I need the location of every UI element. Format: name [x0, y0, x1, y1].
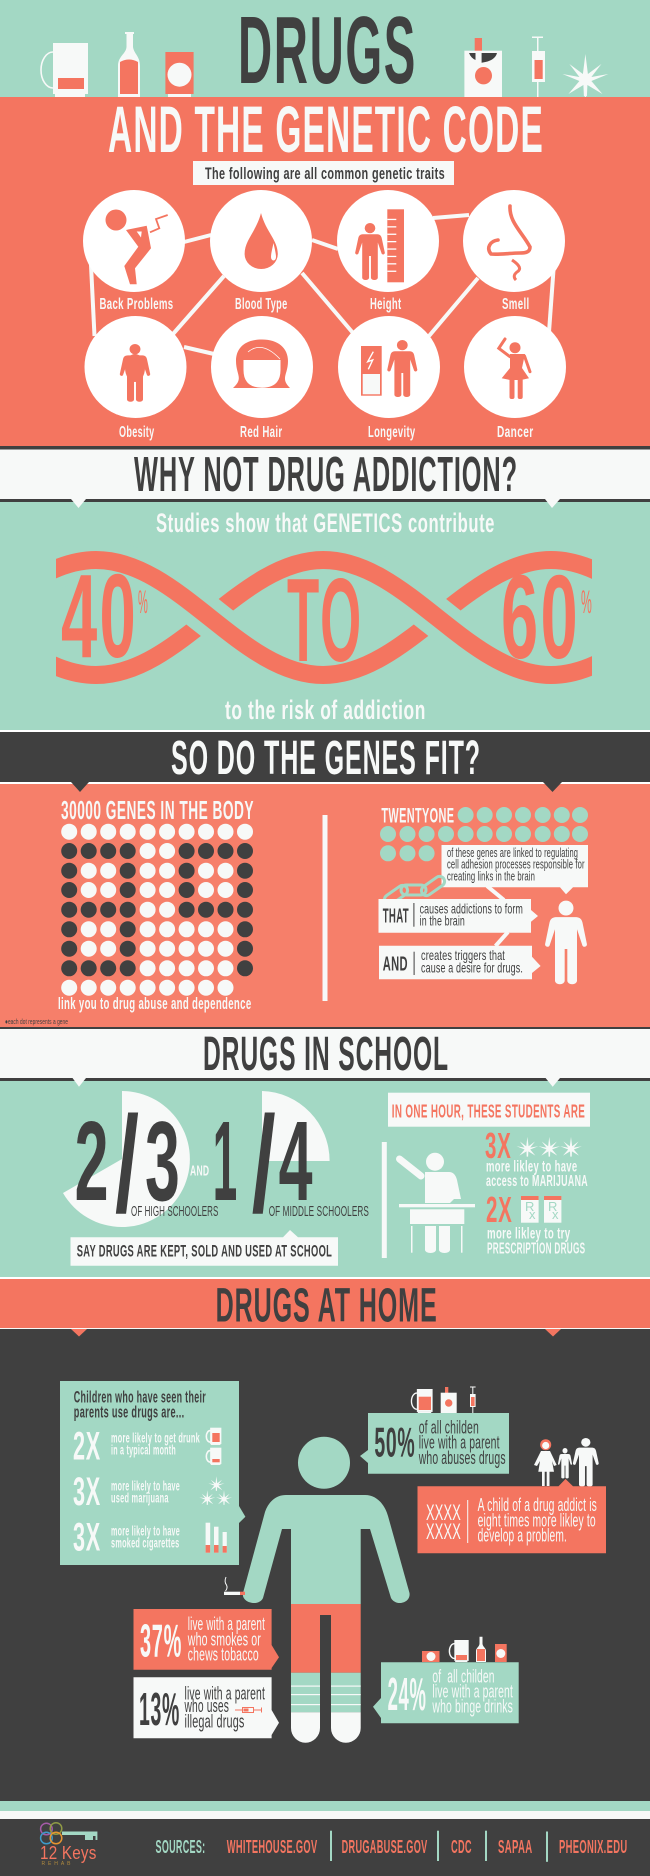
list: sources: DRUGABUSE.GOV: [342, 1837, 428, 1857]
callout: 50 percent: of all childen: [419, 1417, 479, 1437]
stat: 3x cigarettes: smoked cigarettes: [111, 1535, 180, 1550]
logo: 12 keys rehab: REHAB: [42, 1861, 71, 1867]
text: prescription drugs: more likley to try: [487, 1226, 570, 1243]
callout: 37 percent: 37%: [140, 1615, 182, 1667]
panel: school stats: [0, 1078, 650, 1277]
heading: drugs at home: DRUGS AT HOME: [216, 1280, 438, 1332]
callout: 37 percent: chews tobacco: [188, 1645, 259, 1665]
heading: 30000 genes: 30000 GENES IN THE BODY: [61, 795, 254, 825]
callout: eight times more likley: develop a problem.: [478, 1526, 567, 1546]
panel: header band: [0, 0, 650, 104]
callout: 24 percent: [373, 1662, 519, 1723]
callout: 24 percent: live with a parent: [432, 1681, 513, 1701]
icon: student at desk: [399, 1153, 475, 1253]
panel: drugs at home header: [0, 1277, 650, 1332]
panel: genetics contribute: %: [581, 584, 592, 620]
callout: and: [379, 946, 541, 979]
stat: 2x drunk: in a typical month: [111, 1443, 176, 1458]
icon: family: [534, 1438, 599, 1487]
trait: height: Height: [370, 296, 402, 313]
callout: 37 percent: [134, 1609, 279, 1670]
trait: obesity: Obesity: [119, 424, 154, 441]
label: common genetic traits: The following are all common genetic traits: [205, 164, 445, 183]
icons: mug, cigarettes, syringe: [411, 1386, 476, 1413]
stat: two thirds: 3: [145, 1098, 182, 1224]
stat: 3x marijuana: [73, 1470, 180, 1514]
callout: that: in the brain: [420, 912, 465, 928]
callout: 13 percent: 13%: [139, 1683, 180, 1735]
list: sources: SAPAA: [498, 1837, 532, 1857]
chart: dna helix: [0, 560, 650, 675]
trait: red hair: Red Hair: [240, 424, 282, 441]
callout: eight times more likley: XXXX: [426, 1519, 461, 1544]
callout: children who have seen: Children who have seen their: [74, 1387, 206, 1406]
callout: 50 percent: [360, 1413, 509, 1474]
icon: person: [545, 901, 587, 984]
logo: 12 keys rehab: [40, 1823, 97, 1867]
panel: so do the genes fit header: [0, 730, 650, 785]
stat: 3x cigarettes: more likely to have: [111, 1523, 180, 1538]
trait: red hair: [211, 316, 313, 441]
chart: dot grid of genes: [61, 824, 253, 996]
text: of middle schoolers: OF MIDDLE SCHOOLERS: [269, 1204, 369, 1220]
callout: kept, sold and used: SAY DRUGS ARE KEPT, SOLD AND USED AT SCHOOL: [77, 1242, 332, 1261]
chart: one quarter pie: [262, 1091, 330, 1161]
callout: and: creates triggers that: [421, 947, 505, 963]
trait: smell: Smell: [502, 296, 530, 313]
text: of high schoolers: OF HIGH SCHOOLERS: [131, 1204, 218, 1220]
callout: eight times more likley: [418, 1479, 606, 1553]
callout: 24 percent: 24%: [388, 1668, 427, 1720]
icons: three leaves: [517, 1137, 582, 1157]
text: prescription drugs: [487, 1226, 585, 1257]
trait: dancer: Dancer: [497, 424, 534, 441]
callout: 24 percent: who binge drinks: [432, 1697, 513, 1717]
text: link to drug abuse: link you to drug abuse and dependence: [58, 994, 251, 1013]
icon: beer mug: [41, 43, 88, 97]
panel: genetics contribute: TO: [287, 554, 363, 687]
list: sources: [227, 1831, 628, 1862]
panel: genetic traits: [0, 92, 650, 446]
panel: why not drug addiction header: [0, 446, 650, 502]
stat: one quarter: /: [252, 1088, 279, 1240]
stat: 40 percent: [61, 550, 148, 683]
callout: 50 percent: 50%: [374, 1419, 415, 1466]
icons: prescription bottles: R: [525, 1199, 535, 1214]
panel: genetics contribute: [0, 499, 650, 730]
callout: 13 percent: who uses: [184, 1696, 229, 1716]
stat: one quarter: 4: [279, 1098, 315, 1224]
trait: longevity: [338, 316, 440, 441]
callout: that: [378, 899, 538, 933]
connector lines between traits: [91, 215, 554, 354]
panel: home stats: [0, 1328, 650, 1801]
icons: prescription bottles: R: [548, 1199, 558, 1214]
text: access to marijuana: [486, 1159, 588, 1190]
trait: obesity: [84, 316, 186, 441]
callout: that: causes addictions to form: [420, 900, 523, 916]
callout: children who have seen: parents use drugs are...: [74, 1402, 184, 1421]
callout: 50 percent: live with a parent: [419, 1433, 500, 1453]
heading: twentyone: TWENTYONE: [381, 805, 454, 828]
stat: three times: 3X: [485, 1125, 512, 1166]
trait: blood type: Blood Type: [235, 296, 288, 313]
label: common genetic traits: [193, 161, 454, 185]
icon: liquor bottle: [118, 32, 140, 97]
label: in one hour: [388, 1093, 590, 1127]
panel: drugs in school header: [0, 1027, 650, 1081]
callout: eight times more likley: XXXX: [426, 1500, 461, 1525]
list: sources: WHITEHOUSE.GOV: [227, 1837, 318, 1857]
callout: 37 percent: who smokes or: [187, 1629, 261, 1649]
callout: 13 percent: [134, 1677, 279, 1738]
trait: back problems: [83, 190, 185, 313]
trait: blood type: [210, 190, 312, 313]
icon: can: [165, 52, 194, 97]
icon: small syringe: [235, 1708, 262, 1712]
callout: cell adhesion: [442, 845, 588, 894]
icon: syringe: [532, 36, 545, 97]
panel: genes: [0, 782, 650, 1027]
chart: two thirds pie: [63, 1091, 190, 1227]
icon: lit cigarette: [224, 1577, 245, 1595]
stat: 3x cigarettes: 3X: [73, 1516, 101, 1560]
stat: two thirds: [75, 1088, 182, 1240]
stat: 2x drunk: 2X: [73, 1424, 101, 1468]
text: access to marijuana: more likley to have: [486, 1159, 578, 1176]
panel: footer: [0, 1801, 650, 1876]
callout: 50 percent: who abuses drugs: [418, 1448, 506, 1468]
stat: 2x drunk: more likely to get drunk: [111, 1431, 200, 1446]
stat: two thirds: /: [115, 1088, 142, 1240]
stat: 60 percent: 60: [501, 551, 580, 684]
stat: two thirds: 2: [75, 1098, 111, 1224]
trait: height: [337, 190, 439, 313]
icons: prescription bottles: [521, 1196, 561, 1223]
trait: smell: [463, 190, 565, 313]
stat: two times: 2X: [486, 1189, 512, 1230]
footnote: each dot: ●each dot represents a gene: [5, 1017, 68, 1026]
callout: 37 percent: live with a parent: [188, 1614, 265, 1634]
icon: chain links: [382, 874, 447, 907]
list: sources: CDC: [451, 1837, 472, 1857]
chart: twenty-one mint dots: [380, 807, 588, 861]
icon: three leaves: [199, 1476, 232, 1505]
panel: footer: SOURCES:: [156, 1837, 206, 1857]
stat: one quarter: [213, 1088, 315, 1240]
figure: person: [243, 1437, 410, 1743]
stat: 3x marijuana: used marijuana: [111, 1491, 169, 1506]
stat: 3x marijuana: more likely to have: [111, 1479, 180, 1494]
callout: 13 percent: illegal drugs: [184, 1712, 244, 1732]
icon: two mugs: [206, 1428, 221, 1465]
icons: can, mug, bottle, can: [422, 1637, 507, 1662]
stat: 40 percent: 40: [61, 550, 138, 683]
callout: that: THAT: [383, 906, 409, 928]
text: risk of addiction: to the risk of addiction: [225, 695, 426, 725]
text: and: AND: [190, 1163, 209, 1180]
stat: 2x drunk: [73, 1424, 200, 1468]
stat: 60 percent: [501, 551, 592, 684]
callout: kept, sold and used: [70, 1230, 338, 1266]
stat: 3x cigarettes: [73, 1516, 180, 1560]
trait: dancer: [464, 316, 566, 441]
logo: 12 keys rehab: 12 Keys: [40, 1843, 97, 1863]
trait: back problems: Back Problems: [100, 296, 174, 313]
callout: 13 percent: live with a parent: [184, 1683, 265, 1703]
icon: cigarettes: [206, 1523, 227, 1553]
icons: prescription bottles: x: [529, 1207, 536, 1222]
icon: cigarette pack: [464, 38, 502, 97]
callout: cell adhesion: creating links in the brain: [447, 870, 535, 884]
stat: one quarter: 1: [213, 1098, 239, 1224]
trait: longevity: Longevity: [368, 424, 416, 441]
callout: 24 percent: of all childen: [432, 1666, 495, 1686]
icons: prescription bottles: x: [552, 1207, 559, 1222]
callout: and: AND: [383, 954, 408, 976]
callout: and: cause a desire for drugs.: [421, 959, 523, 975]
callout: children who have seen: [60, 1381, 245, 1565]
stat: 3x marijuana: 3X: [73, 1470, 101, 1514]
panel: genetics contribute: %: [138, 584, 148, 620]
connector lines to callouts: [487, 886, 508, 946]
panel: header band: DRUGS: [238, 0, 417, 104]
icon: marijuana leaf: [562, 54, 608, 96]
